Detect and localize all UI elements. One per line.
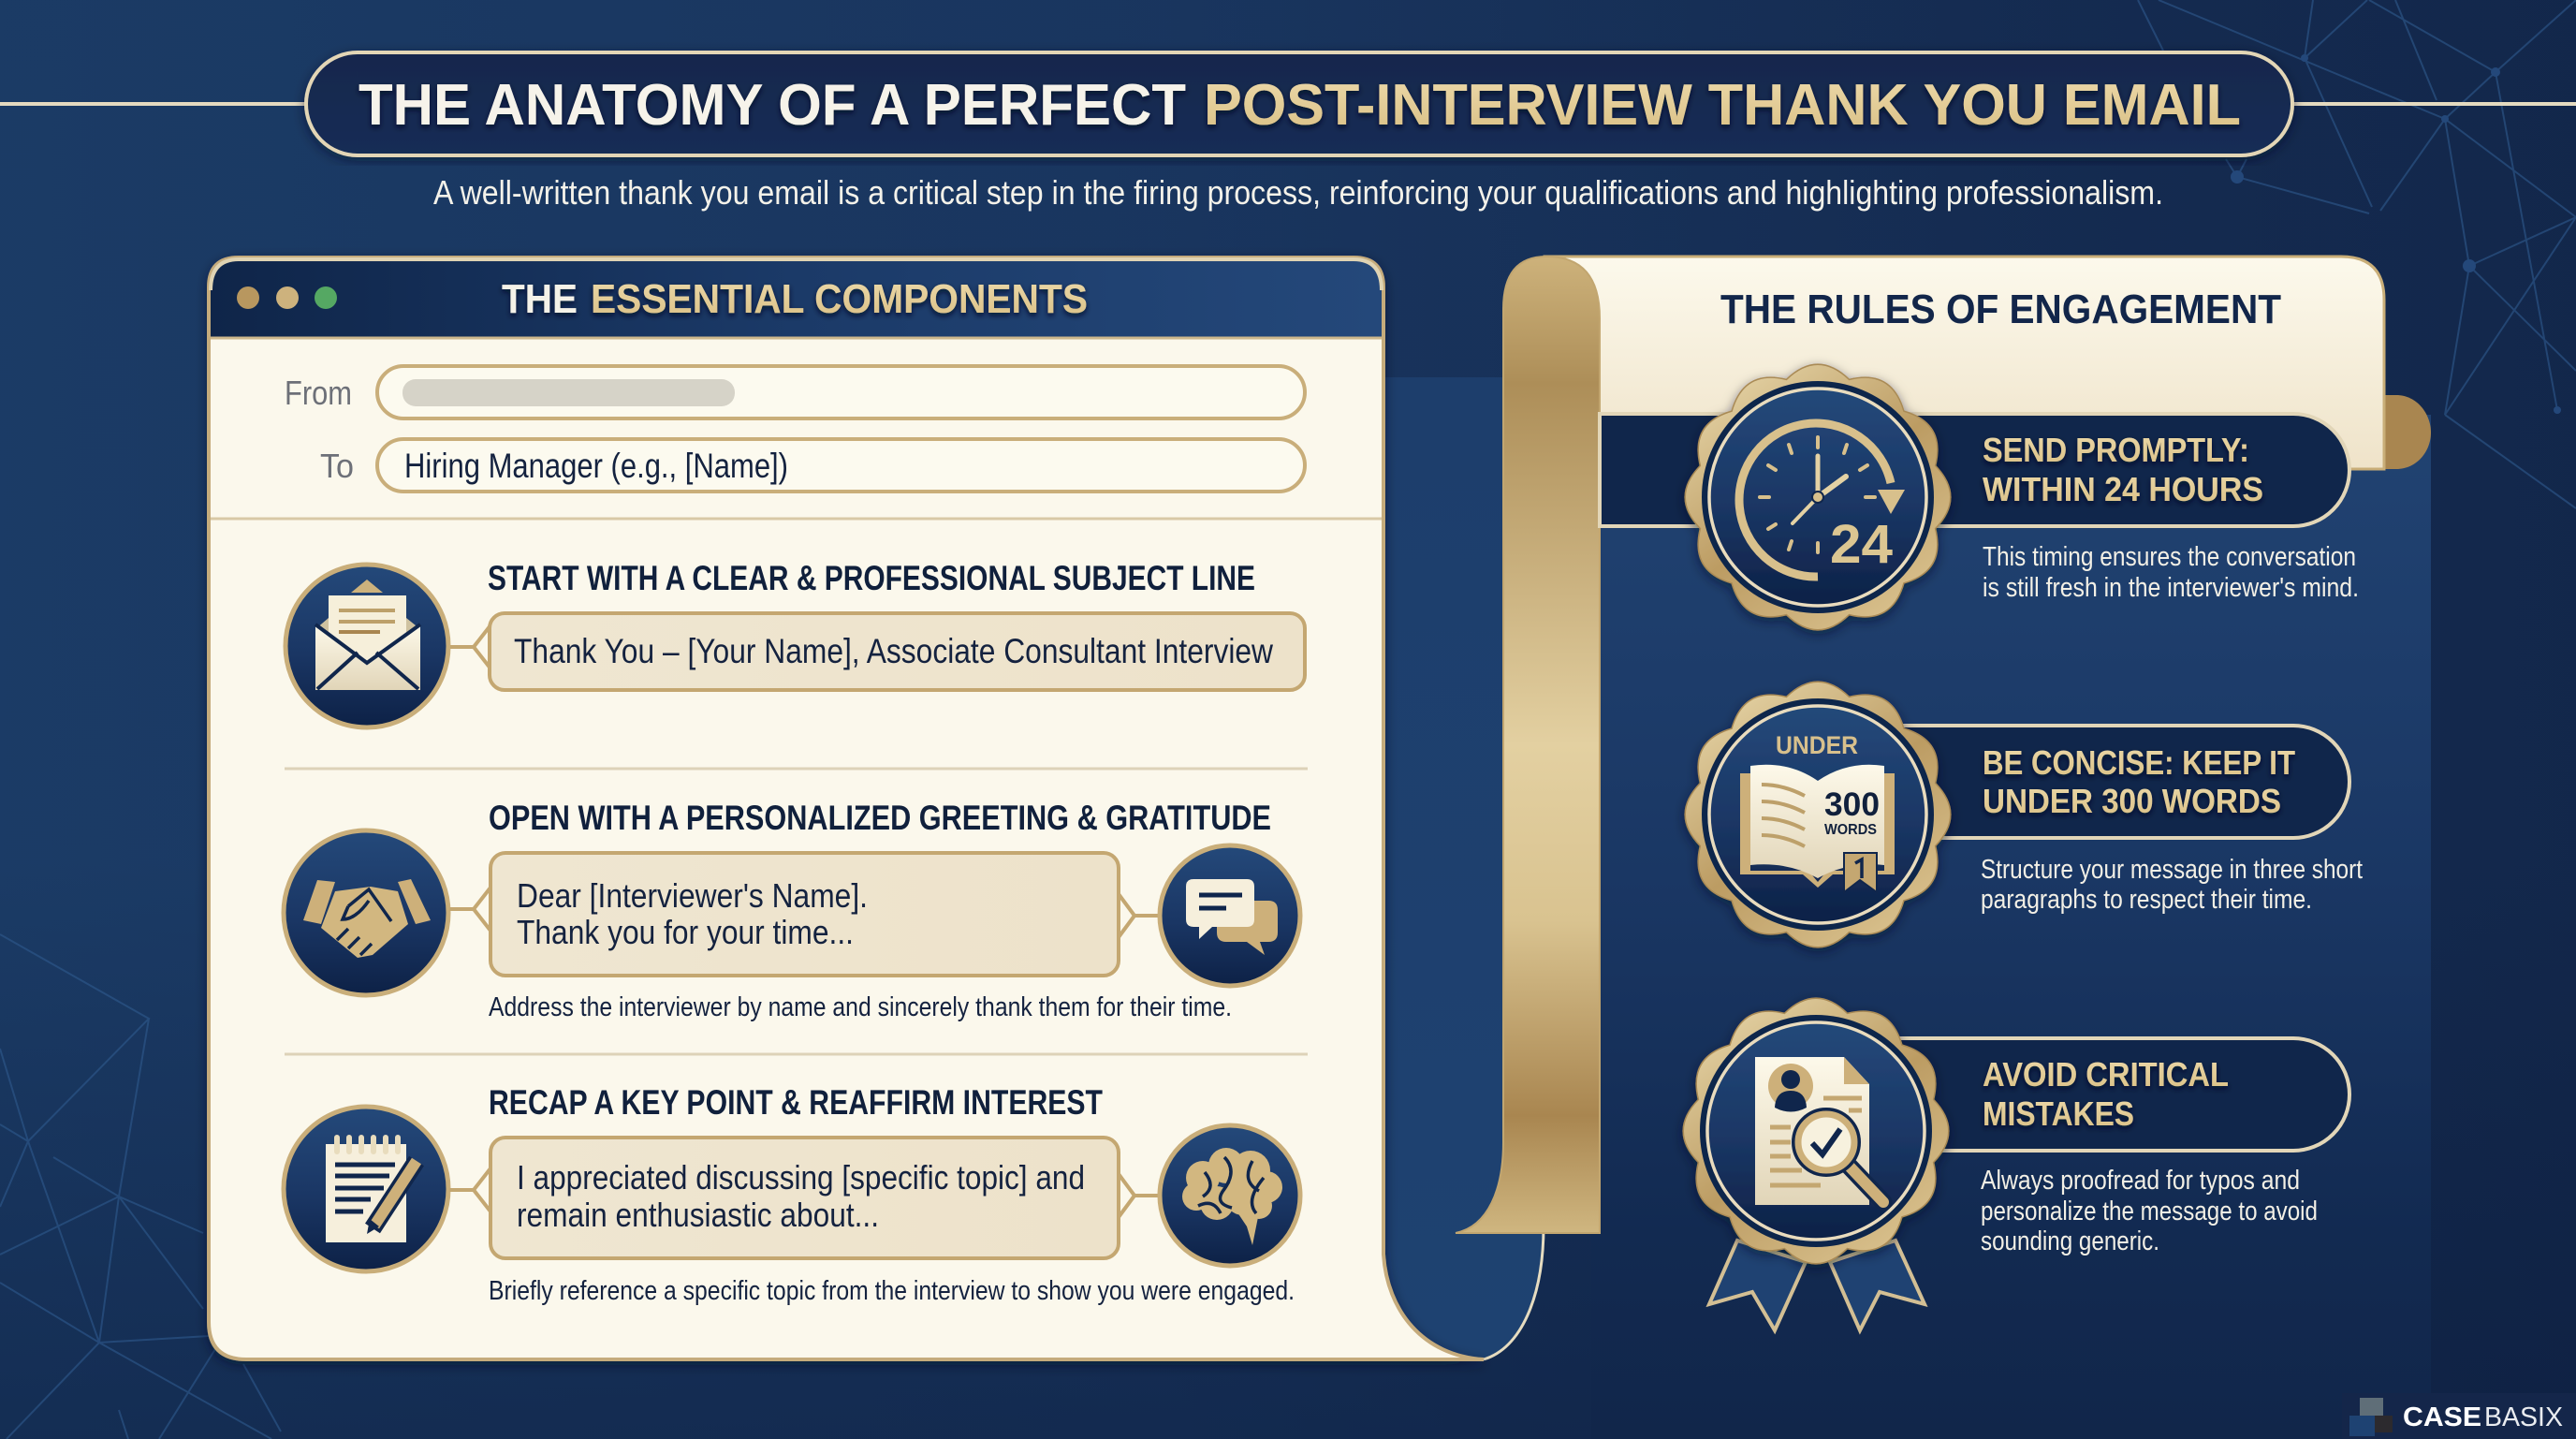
title text gold: POST-INTERVIEW THANK YOU EMAIL [1204,73,2241,138]
rule 2: be concise [1685,682,2363,947]
component 2: greeting [284,799,1300,1022]
heading 1: START WITH A CLEAR & PROFESSIONAL SUBJECT LINE [488,559,1255,597]
badge: clock 24: 24 [1830,514,1893,575]
callout: recap example: I appreciated discussing [specific topic] and [517,1158,1085,1197]
description: send promptly: This timing ensures the conversation [1983,542,2356,572]
icon: envelope [285,565,448,727]
heading: rules of engagement: THE RULES OF ENGAGEMENT [1720,286,2281,332]
window dots [237,286,337,309]
component 1: subject line [285,559,1305,727]
curl edge [1484,1226,1544,1359]
icon: speech bubbles [1160,845,1300,986]
scroll blue body [1591,415,2431,1439]
description: avoid mistakes: sounding generic. [1981,1226,2159,1256]
callout: greeting example: Dear [Interviewer's Name]. [517,876,868,915]
window paper [209,257,1484,1359]
window heading: THE [502,276,578,322]
component 3: recap [284,1083,1300,1306]
heading: be concise: BE CONCISE: KEEP IT [1983,743,2295,782]
to field [320,439,1305,492]
from field [285,366,1305,418]
banner rule lines [0,102,2576,106]
logo: casebasix [2342,1393,2576,1439]
icon: brain [1160,1125,1300,1266]
callout: greeting example: Thank you for your time... [517,913,854,951]
callout: recap example [449,1138,1159,1258]
window heading: ESSENTIAL COMPONENTS [591,276,1088,322]
to field: Hiring Manager (e.g., [Name]) [404,447,788,485]
band 2 [1825,726,2349,838]
description: avoid mistakes: personalize the message to avoid [1981,1197,2318,1226]
title text white: THE ANATOMY OF A PERFECT [359,73,1186,138]
badge: book 300 words: UNDER [1776,731,1858,759]
rule 3: avoid mistakes [1683,998,2349,1330]
heading: send promptly: SEND PROMPTLY: [1983,431,2249,469]
icon: notepad and pencil [284,1107,448,1271]
to field: To [320,447,354,485]
badge: ribbon and document [1683,998,1949,1330]
band 3 [1825,1038,2349,1151]
title banner [0,52,2576,155]
callout: subject example [450,613,1305,690]
logo: casebasix: CASE [2403,1402,2481,1432]
panel: rules of engagement scroll [1544,257,2431,1439]
heading: send promptly [1983,431,2263,508]
callout: subject example: Thank You – [Your Name], Associate Consultant Interview [514,632,1273,670]
badge: book 300 words [1685,682,1951,947]
band 1 [1600,414,2349,526]
banner pill [306,52,2292,155]
description: send promptly: is still fresh in the interviewer's mind. [1983,573,2359,603]
heading: avoid mistakes: MISTAKES [1983,1094,2134,1133]
description: send promptly [1983,542,2359,603]
description: be concise: Structure your message in three short [1981,855,2363,885]
heading: avoid mistakes [1983,1055,2229,1133]
caption 2: Address the interviewer by name and sincerely thank them for their time. [489,992,1232,1022]
panel back: left curl [1383,377,1544,1359]
description: be concise [1981,855,2363,915]
scroll cream header [1544,257,2384,469]
callout: greeting example [449,853,1159,976]
heading: be concise: UNDER 300 WORDS [1983,782,2281,820]
description: avoid mistakes: Always proofread for typos and [1981,1166,2300,1196]
ribbon tails [1709,1241,1925,1330]
window title bar [211,259,1382,337]
badge: book 300 words: 300 [1824,786,1880,823]
panel: essential components window [209,257,1484,1359]
badge: clock 24 [1685,364,1951,630]
rule 1: send promptly [1600,364,2359,630]
scroll gold roller [1456,257,1600,1233]
heading 2: OPEN WITH A PERSONALIZED GREETING & GRATITUDE [489,799,1271,837]
logo: casebasix: BASIX [2484,1402,2563,1432]
callout: recap example: remain enthusiastic about... [517,1196,879,1234]
heading: send promptly: WITHIN 24 HOURS [1983,470,2263,508]
description: avoid mistakes [1981,1166,2318,1256]
heading: be concise [1983,743,2295,820]
icon: handshake [284,830,448,995]
heading: avoid mistakes: AVOID CRITICAL [1983,1055,2229,1094]
right roller end [2384,395,2431,469]
description: be concise: paragraphs to respect their time. [1981,885,2312,915]
heading 3: RECAP A KEY POINT & REAFFIRM INTEREST [489,1083,1103,1122]
badge: book 300 words: WORDS [1824,822,1877,838]
from field: From [285,374,352,412]
subtitle: A well-written thank you email is a critical step in the firing process, reinforcing your qualifications and highlighting professionalism. [433,173,2163,212]
caption 3: Briefly reference a specific topic from the interview to show you were engaged. [489,1276,1295,1306]
